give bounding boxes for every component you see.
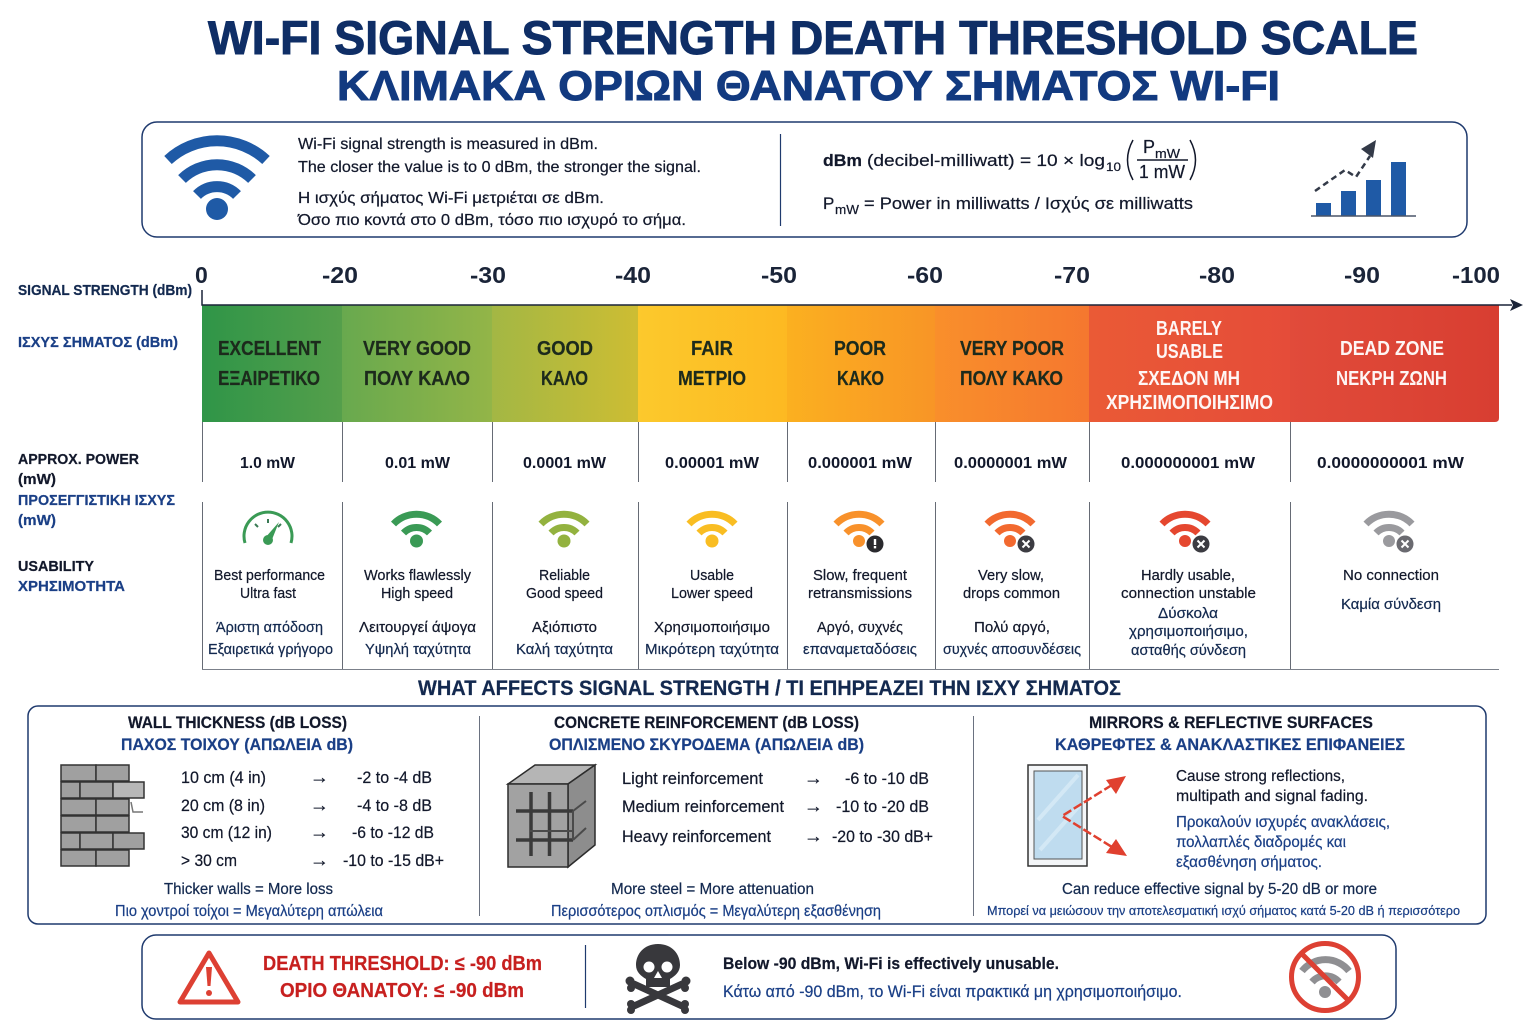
text: explanation: Η ισχύς σήματος Wi-Fi μετριέται σε dBm. [298,190,604,207]
label: very good [363,338,471,390]
label: fair [678,338,746,390]
table: wall loss values: → [310,822,329,842]
text: mirror description: Προκαλούν ισχυρές ανακλάσεις, [1176,814,1390,831]
note: mirrors [987,881,1460,918]
heading: mirrors: MIRRORS & REFLECTIVE SURFACES [1089,713,1373,732]
panel: factors [28,706,1486,924]
icon: brick wall [61,765,144,866]
usability: fair: Usable [690,567,734,584]
label: good [537,338,593,390]
label: good: GOOD [537,338,593,360]
row labels: ΙΣΧΥΣ ΣΗΜΑΤΟΣ (dBm) [18,335,178,351]
approximate power values [240,455,1465,472]
usability: dead zone: Καμία σύνδεση [1341,596,1441,613]
label: very good: VERY GOOD [363,338,471,360]
approximate power values: 0.000000001 mW [1121,455,1256,472]
row labels: APPROX. POWER [18,452,140,468]
table: concrete loss values: → [804,796,823,816]
approximate power values: 0.0000001 mW [954,455,1068,472]
scale axis labels: -70 [1054,262,1090,288]
label: excellent: ΕΞΑΙΡΕΤΙΚΟ [218,368,320,390]
usability: excellent [208,567,333,658]
usability: excellent: Εξαιρετικά γρήγορο [208,641,333,658]
table: wall loss values: -2 to -4 dB [357,769,432,787]
panel: wall thickness [61,713,444,920]
table: concrete loss values [622,768,933,846]
usability: poor: Slow, frequent [813,567,908,584]
usability: excellent: Best performance [214,567,325,584]
label: barely usable: ΧΡΗΣΙΜΟΠΟΙΗΣΙΜΟ [1106,392,1273,414]
usability: very good [359,567,476,658]
label: good: ΚΑΛΟ [541,368,588,390]
icon: rising bar chart [1311,140,1416,216]
formula: P [823,194,834,213]
label: barely usable: USABLE [1156,341,1223,363]
icon: reinforced concrete cube [508,765,595,867]
table: concrete loss values: Heavy reinforcement [622,828,771,846]
label: poor: POOR [834,338,886,360]
text: mirror description: πολλαπλές διαδρομές και [1176,834,1346,851]
heading: wall thickness: ΠΑΧΟΣ ΤΟΙΧΟΥ (ΑΠΩΛΕΙΑ dB) [121,735,353,754]
table: concrete loss values: → [804,768,823,788]
heading: concrete [549,713,864,754]
usability: very good: Υψηλή ταχύτητα [365,641,471,658]
usability: barely usable: χρησιμοποιήσιμο, [1129,623,1248,640]
note: concrete: More steel = More attenuation [611,881,814,898]
gradient scale bar [202,305,1499,422]
usability: fair: Χρησιμοποιήσιμο [654,619,770,636]
usability: barely usable: ασταθής σύνδεση [1131,642,1246,659]
icon: large wifi [168,141,266,220]
scale axis labels: -100 [1452,262,1500,288]
heading: concrete: CONCRETE REINFORCEMENT (dB LOSS) [554,713,859,732]
usability: very poor [943,567,1081,658]
label: excellent: EXCELLENT [218,338,321,360]
scale axis labels: -30 [470,262,506,288]
usability: very poor: Very slow, [978,567,1044,584]
formula: dBm [823,151,862,170]
formula: (decibel-milliwatt) = 10 × log [867,151,1105,170]
icon: wifi dead zone with x badge [1366,514,1414,552]
table: concrete loss values: -6 to -10 dB [845,770,929,788]
table: wall loss values: 20 cm (8 in) [181,797,265,815]
usability: good [516,567,613,658]
formula: 1 mW [1139,162,1185,182]
scale axis labels: -20 [322,262,358,288]
table: wall loss values: → [310,850,329,870]
icon: wifi fair [689,514,735,548]
note: mirrors: Μπορεί να μειώσουν την αποτελεσματική ισχύ σήματος κατά 5-20 dB ή περισσότερο [987,903,1460,918]
text: mirror description: Cause strong reflections, [1176,768,1345,785]
text: mirror description: multipath and signal fading. [1176,788,1368,805]
table: wall loss values: → [310,767,329,787]
note: concrete: Περισσότερος οπλισμός = Μεγαλύτερη εξασθένηση [551,903,881,920]
label: dead zone [1336,338,1447,390]
usability text [208,567,1441,659]
label: barely usable: ΣΧΕΔΟΝ ΜΗ [1138,368,1240,390]
heading: wall thickness: WALL THICKNESS (dB LOSS) [128,713,347,732]
label: very poor: ΠΟΛΥ ΚΑΚΟ [960,368,1063,390]
table: concrete loss values: -10 to -20 dB [836,798,929,816]
panel: death threshold [142,935,1396,1019]
table: concrete loss values: Light reinforcement [622,770,763,788]
row labels: ΠΡΟΣΕΓΓΙΣΤΙΚΗ ΙΣΧΥΣ [18,493,175,509]
approximate power values: 1.0 mW [240,455,296,472]
table: wall loss values: 30 cm (12 in) [181,824,272,842]
usability: fair [645,567,779,658]
formula [823,137,1196,217]
formula: P [1143,137,1155,157]
label: excellent [218,338,321,390]
usability: good: Αξιόπιστο [532,619,597,636]
usability: very poor: Πολύ αργό, [974,619,1050,636]
icon: wifi very good [394,514,440,548]
approximate power values: 0.000001 mW [808,455,913,472]
label: fair: ΜΕΤΡΙΟ [678,368,746,390]
text: mirror description: εξασθένηση σήματος. [1176,854,1322,871]
row labels: (mW) [18,472,56,488]
heading: wall thickness [121,713,353,754]
table: wall loss values: 10 cm (4 in) [181,769,266,787]
scale axis labels: 0 [195,262,208,288]
axis arrow [202,290,1523,311]
label: very poor [960,338,1064,390]
label: dead zone: DEAD ZONE [1340,338,1444,360]
note: mirrors: Can reduce effective signal by 5-20 dB or more [1062,881,1377,898]
label: dead zone: ΝΕΚΡΗ ΖΩΝΗ [1336,368,1447,390]
icon: mirror with reflected signal [1028,765,1127,866]
icon: warning triangle [180,953,238,1002]
text: explanation: Wi-Fi signal strength is measured in dBm. [298,136,598,153]
usability: fair: Lower speed [671,585,753,602]
note: wall: Πιο χοντροί τοίχοι = Μεγαλύτερη απώλεια [115,903,383,920]
text: death threshold [263,953,542,1002]
usability: dead zone [1341,567,1441,613]
label: fair: FAIR [691,338,734,360]
scale axis labels: -90 [1344,262,1380,288]
table: wall loss values: > 30 cm [181,852,237,870]
formula: 10 [1106,160,1121,174]
label: barely usable [1106,318,1273,414]
text: below -90 dBm [723,955,1182,1001]
usability: very poor: drops common [963,585,1060,602]
row labels [18,283,192,595]
table: concrete loss values: Medium reinforcement [622,798,784,816]
label: poor: ΚΑΚΟ [837,368,884,390]
row labels: SIGNAL STRENGTH (dBm) [18,283,192,299]
usability: fair: Μικρότερη ταχύτητα [645,641,779,658]
heading: what affects signal strength: WHAT AFFECTS SIGNAL STRENGTH / ΤΙ ΕΠΗΡΕΑΖΕΙ ΤΗΝ ΙΣΧΥ ΣΗΜΑΤΟΣ [418,677,1121,700]
scale axis labels: -50 [761,262,797,288]
icon: wifi very poor with x badge [987,514,1034,552]
formula: mW [1155,146,1181,161]
formula: = Power in milliwatts / Ισχύς σε milliwatts [864,194,1193,213]
panel: concrete reinforcement [508,713,933,920]
table: wall loss values: -10 to -15 dB+ [343,852,444,870]
usability: very good: High speed [381,585,453,602]
usability: very good: Λειτουργεί άψογα [359,619,476,636]
scale axis labels: -80 [1199,262,1235,288]
heading: mirrors [1055,713,1405,754]
icon: wifi barely usable with x badge [1162,514,1210,552]
table: wall loss values: -6 to -12 dB [352,824,434,842]
note: wall [115,881,383,920]
note: wall: Thicker walls = More loss [164,881,333,898]
usability: barely usable: Hardly usable, [1141,567,1235,584]
title: WI-FI SIGNAL STRENGTH DEATH THRESHOLD SCALE [208,11,1418,64]
label: very good: ΠΟΛΥ ΚΑΛΟ [364,368,470,390]
usability: very poor: συχνές αποσυνδέσεις [943,641,1081,658]
table: wall loss values: → [310,795,329,815]
icon: wifi good [541,514,587,548]
usability: good: Καλή ταχύτητα [516,641,613,658]
approximate power values: 0.01 mW [385,455,451,472]
scale axis labels [195,262,1500,288]
label: very poor: VERY POOR [960,338,1064,360]
text: below -90 dBm: Κάτω από -90 dBm, το Wi-Fi είναι πρακτικά μη χρησιμοποιήσιμο. [723,983,1182,1001]
approximate power values: 0.00001 mW [665,455,760,472]
row labels: USABILITY [18,559,94,575]
table: wall loss values [181,767,444,870]
row labels: ΧΡΗΣΙΜΟΤΗΤΑ [18,579,126,595]
approximate power values: 0.0000000001 mW [1317,455,1465,472]
usability: poor: retransmissions [808,585,912,602]
table grid [202,422,1499,670]
usability: good: Reliable [539,567,590,584]
scale axis labels: -40 [615,262,651,288]
usability: good: Good speed [526,585,603,602]
approximate power values: 0.0001 mW [523,455,607,472]
text: mirror description [1176,768,1390,871]
usability: poor: επαναμεταδόσεις [803,641,917,658]
usability: dead zone: No connection [1343,567,1439,584]
usability: barely usable: Δύσκολα [1158,605,1218,622]
usability: poor: Αργό, συχνές [817,619,903,636]
table: concrete loss values: → [804,826,823,846]
icon: skull and crossbones [626,944,690,1014]
panel: mirrors [987,713,1460,918]
icon: wifi poor with warning badge [836,514,884,552]
note: concrete [551,881,881,920]
heading: mirrors: ΚΑΘΡΕΦΤΕΣ & ΑΝΑΚΛΑΣΤΙΚΕΣ ΕΠΙΦΑΝΕΙΕΣ [1055,735,1405,754]
text: explanation [297,136,701,229]
row labels: (mW) [18,513,56,529]
text: below -90 dBm: Below -90 dBm, Wi-Fi is effectively unusable. [723,955,1059,973]
label: poor [834,338,886,390]
usability: poor [803,567,917,658]
formula: mW [835,202,860,217]
label: barely usable: BARELY [1156,318,1223,340]
usability: barely usable: connection unstable [1121,585,1256,602]
text: explanation: The closer the value is to 0 dBm, the stronger the signal. [298,159,701,176]
icon: no wifi [1292,944,1358,1010]
title: ΚΛΙΜΑΚΑ ΟΡΙΩΝ ΘΑΝΑΤΟΥ ΣΗΜΑΤΟΣ WI-FI [337,62,1280,109]
table: concrete loss values: -20 to -30 dB+ [832,828,933,846]
text: explanation: Όσο πιο κοντά στο 0 dBm, τόσο πιο ισχυρό το σήμα. [297,212,686,229]
text: death threshold: DEATH THRESHOLD: ≤ -90 dBm [263,953,542,975]
title [208,11,1418,109]
usability: barely usable [1121,567,1256,659]
panel: dBm explanation [142,122,1467,237]
scale axis labels: -60 [907,262,943,288]
text: death threshold: ΟΡΙΟ ΘΑΝΑΤΟΥ: ≤ -90 dBm [280,980,524,1002]
icon: gauge [244,512,292,545]
usability: excellent: Ultra fast [240,585,297,602]
table: wall loss values: -4 to -8 dB [357,797,432,815]
usability: excellent: Άριστη απόδοση [216,619,323,636]
heading: concrete: ΟΠΛΙΣΜΕΝΟ ΣΚΥΡΟΔΕΜΑ (ΑΠΩΛΕΙΑ dB) [549,735,864,754]
usability: very good: Works flawlessly [364,567,471,584]
